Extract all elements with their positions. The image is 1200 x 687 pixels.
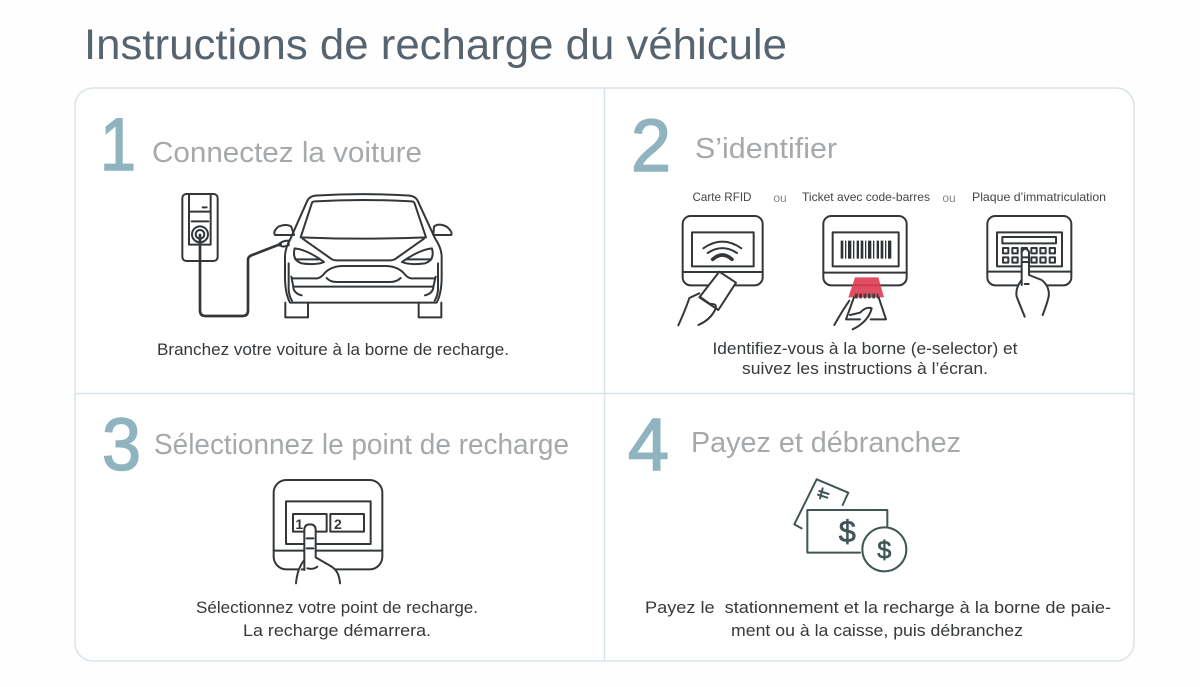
icon: charging station <box>182 194 218 261</box>
icon: receipt, banknote and coin <box>794 479 906 571</box>
step 2 heading: S’identifier <box>695 133 837 165</box>
step 3 heading: Sélectionnez le point de recharge <box>154 429 569 461</box>
step 1 heading: Connectez la voiture <box>152 137 422 169</box>
title: Instructions de recharge du véhicule <box>84 21 787 69</box>
option labels: Carte RFID <box>692 190 752 204</box>
step 3 text: La recharge démarrera. <box>243 622 431 640</box>
option labels: ou <box>773 191 787 205</box>
icon: selection terminal and hand: 2 <box>334 516 342 532</box>
icon: pointing hand <box>296 524 340 583</box>
step 2 text: Identifiez-vous à la borne (e-selector) et <box>712 340 1018 358</box>
step 3 text <box>196 599 478 640</box>
icon: receipt, banknote and coin: $ <box>877 537 891 565</box>
icon: barcode terminal and ticket <box>823 216 907 329</box>
icon: selection terminal and hand <box>274 480 382 583</box>
option labels: Plaque d’immatriculation <box>972 190 1106 204</box>
charging cable <box>200 235 281 316</box>
step 4 heading: Payez et débranchez <box>691 427 961 459</box>
icon: charging station and car <box>182 194 452 317</box>
option labels: ou <box>942 191 956 205</box>
option labels <box>692 190 1106 205</box>
panel: step 2 <box>631 104 1106 378</box>
panel: step 3 <box>102 403 569 640</box>
step 4 text: ment ou à la caisse, puis débranchez <box>731 622 1023 640</box>
step 1 number: 1 <box>100 103 136 186</box>
step 2 text <box>712 340 1018 378</box>
step 2 text: suivez les instructions à l’écran. <box>742 360 988 378</box>
step 1 text: Branchez votre voiture à la borne de recharge. <box>157 341 509 359</box>
icon: car <box>274 194 452 317</box>
icon: receipt, banknote and coin: $ <box>839 515 856 549</box>
step 4 text <box>645 599 1111 640</box>
icon: RFID terminal and card <box>678 216 763 325</box>
step 2 number: 2 <box>631 104 671 187</box>
option labels: Ticket avec code-barres <box>802 190 930 204</box>
step 4 number: 4 <box>628 403 669 486</box>
barcode bars <box>841 223 892 277</box>
step 3 text: Sélectionnez votre point de recharge. <box>196 599 478 617</box>
panel: step 1 <box>100 103 509 359</box>
step 3 number: 3 <box>102 403 141 486</box>
panel grid frame <box>75 88 1134 661</box>
panel: step 4 <box>628 403 1111 640</box>
step 4 text: Payez le stationnement et la recharge à la borne de paie- <box>645 599 1111 617</box>
red scanner beam <box>848 277 884 297</box>
icon: keypad terminal and hand <box>987 216 1071 317</box>
selection numbers: 1 <box>295 516 303 532</box>
